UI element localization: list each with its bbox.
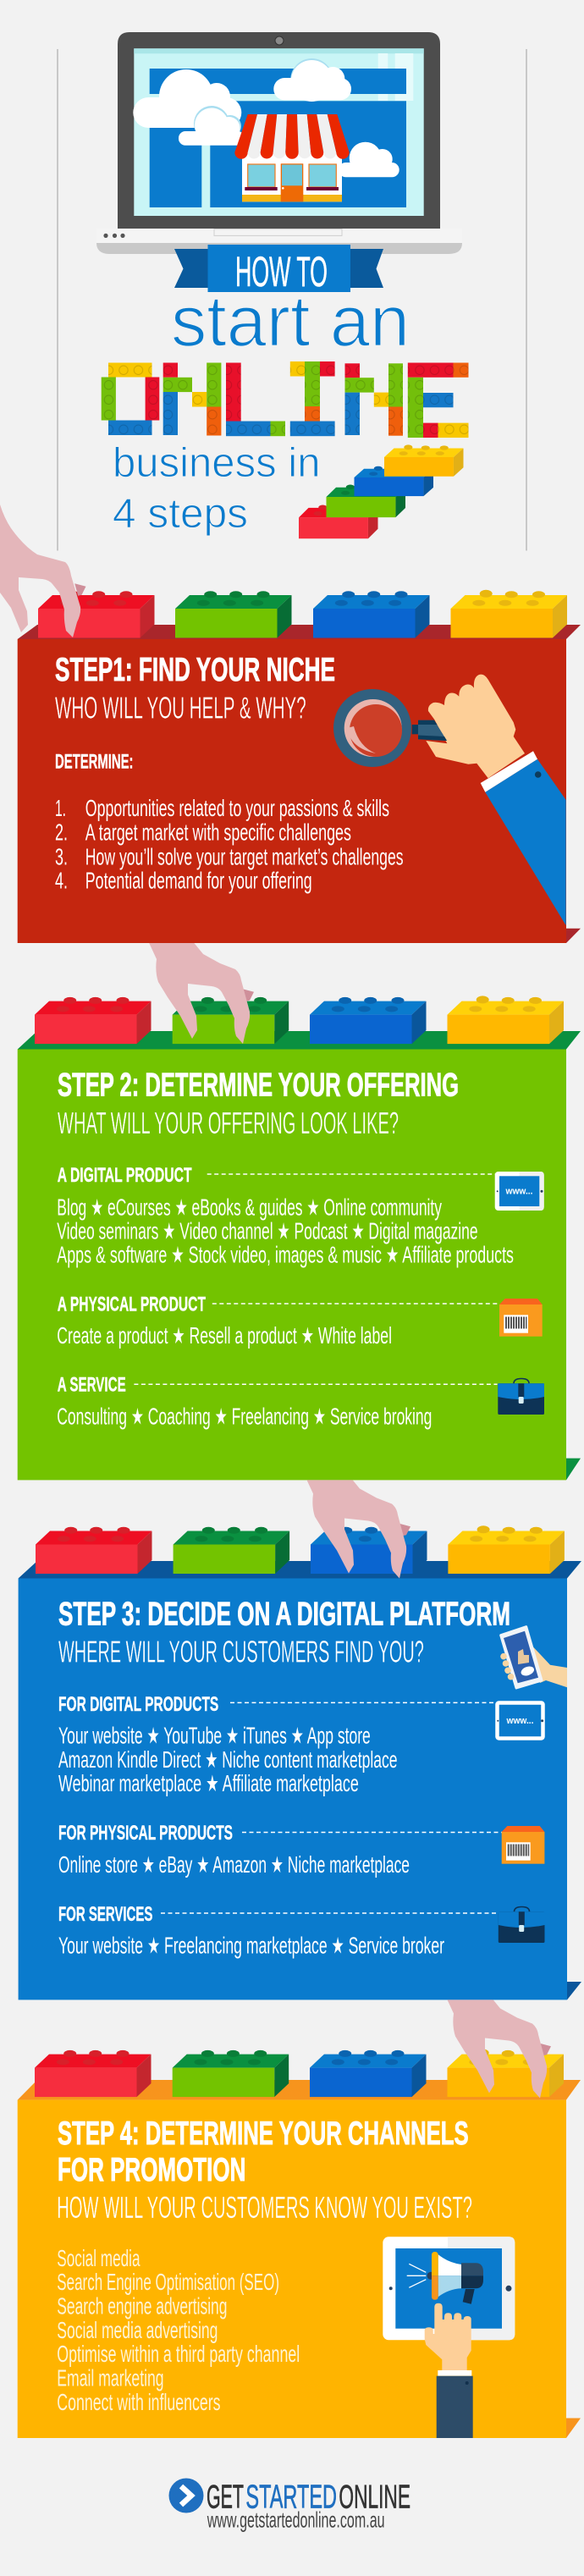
numbered list: 3. bbox=[55, 843, 68, 869]
numbered list bbox=[55, 795, 404, 893]
icon: chevron circle bbox=[169, 2479, 203, 2513]
subheading: WHO WILL YOU HELP & WHY? bbox=[55, 690, 306, 725]
channel list: Search engine advertising bbox=[57, 2292, 227, 2320]
icon: laptop with shop bbox=[96, 32, 462, 254]
hand picking green brick bbox=[146, 935, 254, 1044]
wordmark: STARTED bbox=[245, 2479, 337, 2516]
section: digital products: FOR DIGITAL PRODUCTS bbox=[58, 1693, 218, 1716]
icon: tablet www bbox=[497, 1703, 543, 1739]
panel back edge bbox=[18, 625, 581, 639]
section: digital products: Amazon Kindle Direct ★ Niche content marketplace bbox=[58, 1746, 398, 1773]
channel list: Connect with influencers bbox=[57, 2389, 220, 2415]
icon: briefcase bbox=[498, 1378, 544, 1415]
section: digital products: Webinar marketplace ★ Affiliate marketplace bbox=[58, 1770, 359, 1797]
section: services: FOR SERVICES bbox=[58, 1903, 152, 1926]
hand picking yellow brick bbox=[447, 2000, 551, 2098]
hand picking red brick bbox=[0, 505, 86, 637]
label: determine: DETERMINE: bbox=[55, 750, 134, 773]
section: physical product: Create a product ★ Resell a product ★ White label bbox=[57, 1322, 392, 1349]
icon: tablet with megaphone and hand bbox=[383, 2237, 515, 2438]
section: digital product: Video seminars ★ Video channel ★ Podcast ★ Digital magazine bbox=[57, 1217, 478, 1244]
icon: parcel bbox=[502, 1826, 544, 1864]
channel list: Social media advertising bbox=[57, 2317, 218, 2343]
title: ONLINE in lego letters bbox=[102, 361, 468, 438]
icon: tablet www bbox=[495, 1172, 544, 1211]
brick row bbox=[36, 1525, 565, 1574]
header bbox=[57, 32, 527, 550]
title: 4 steps: 4 steps bbox=[113, 491, 248, 537]
icon: tablet www: www... bbox=[505, 1187, 533, 1197]
numbered list: Opportunities related to your passions & skills bbox=[85, 795, 389, 821]
brick row bbox=[35, 2049, 564, 2097]
panel: step 1 bbox=[0, 505, 581, 943]
footer: logo bbox=[169, 2479, 410, 2533]
panel: step 4 bbox=[18, 1989, 581, 2438]
section: digital product: Apps & software ★ Stock video, images & music ★ Affiliate products bbox=[57, 1242, 514, 1269]
lego stairs bbox=[299, 444, 464, 538]
icon: briefcase bbox=[499, 1906, 545, 1943]
icon: arm holding magnifying glass bbox=[333, 675, 566, 925]
cloud: right bbox=[339, 142, 399, 177]
section: service: Consulting ★ Coaching ★ Freelancing ★ Service broking bbox=[57, 1404, 432, 1431]
section: digital product: Blog ★ eCourses ★ eBooks & guides ★ Online community bbox=[57, 1194, 442, 1221]
cloud: left large bbox=[133, 69, 241, 129]
section: services: Your website ★ Freelancing marketplace ★ Service broker bbox=[58, 1932, 444, 1959]
numbered list: A target market with specific challenges bbox=[85, 819, 351, 846]
channel list bbox=[57, 2245, 300, 2415]
section: services bbox=[58, 1903, 545, 1959]
numbered list: 1. bbox=[55, 795, 66, 821]
heading bbox=[58, 2115, 469, 2188]
heading: STEP1: FIND YOUR NICHE bbox=[55, 652, 335, 688]
numbered list: 2. bbox=[55, 819, 68, 846]
section: digital products: Your website ★ YouTube ★ iTunes ★ App store bbox=[58, 1723, 371, 1750]
hand picking blue brick bbox=[306, 1480, 410, 1578]
icon: parcel bbox=[499, 1299, 543, 1337]
section: digital products bbox=[58, 1693, 543, 1797]
title: business in: business in bbox=[113, 440, 320, 486]
section: digital product: A DIGITAL PRODUCT bbox=[58, 1164, 192, 1187]
brick row bbox=[35, 996, 564, 1044]
section: service: A SERVICE bbox=[58, 1373, 126, 1397]
panel: step 3 bbox=[19, 1470, 581, 2000]
numbered list: How you’ll solve your target market’s challenges bbox=[85, 843, 404, 869]
panel back edge bbox=[19, 1561, 581, 1578]
numbered list: 4. bbox=[55, 867, 68, 893]
panel back edge bbox=[18, 1031, 581, 1050]
icon: hand holding phone bbox=[500, 1627, 567, 1688]
numbered list: Potential demand for your offering bbox=[85, 867, 312, 893]
panel back edge bbox=[18, 2080, 581, 2100]
ribbon: how to bbox=[174, 245, 383, 295]
heading: FOR PROMOTION bbox=[58, 2152, 245, 2188]
wordmark: ONLINE bbox=[339, 2479, 410, 2516]
icon: tablet www: www... bbox=[506, 1716, 533, 1726]
section: physical products bbox=[58, 1822, 544, 1878]
panel: step 2 bbox=[18, 935, 581, 1480]
website: www.getstartedonline.com.au bbox=[207, 2507, 385, 2533]
section: service bbox=[57, 1373, 544, 1431]
section: physical products: FOR PHYSICAL PRODUCTS bbox=[58, 1822, 233, 1845]
section: physical product: A PHYSICAL PRODUCT bbox=[58, 1293, 206, 1316]
cloud: top bbox=[273, 58, 351, 102]
section: physical products: Online store ★ eBay ★ Amazon ★ Niche marketplace bbox=[58, 1851, 410, 1878]
brick row bbox=[38, 590, 567, 638]
title: start an: start an bbox=[171, 281, 410, 362]
cloud: lower bbox=[179, 106, 245, 146]
ribbon: how to: HOW TO bbox=[235, 248, 328, 295]
wordmark: GET bbox=[207, 2479, 244, 2516]
section: digital product bbox=[57, 1164, 544, 1269]
icon: shop bbox=[234, 114, 350, 201]
channel list: Optimise within a third party channel bbox=[57, 2341, 300, 2367]
section: physical product bbox=[57, 1293, 543, 1349]
channel list: Email marketing bbox=[57, 2365, 164, 2391]
channel list: Social media bbox=[57, 2245, 140, 2271]
channel list: Search Engine Optimisation (SEO) bbox=[57, 2269, 279, 2295]
